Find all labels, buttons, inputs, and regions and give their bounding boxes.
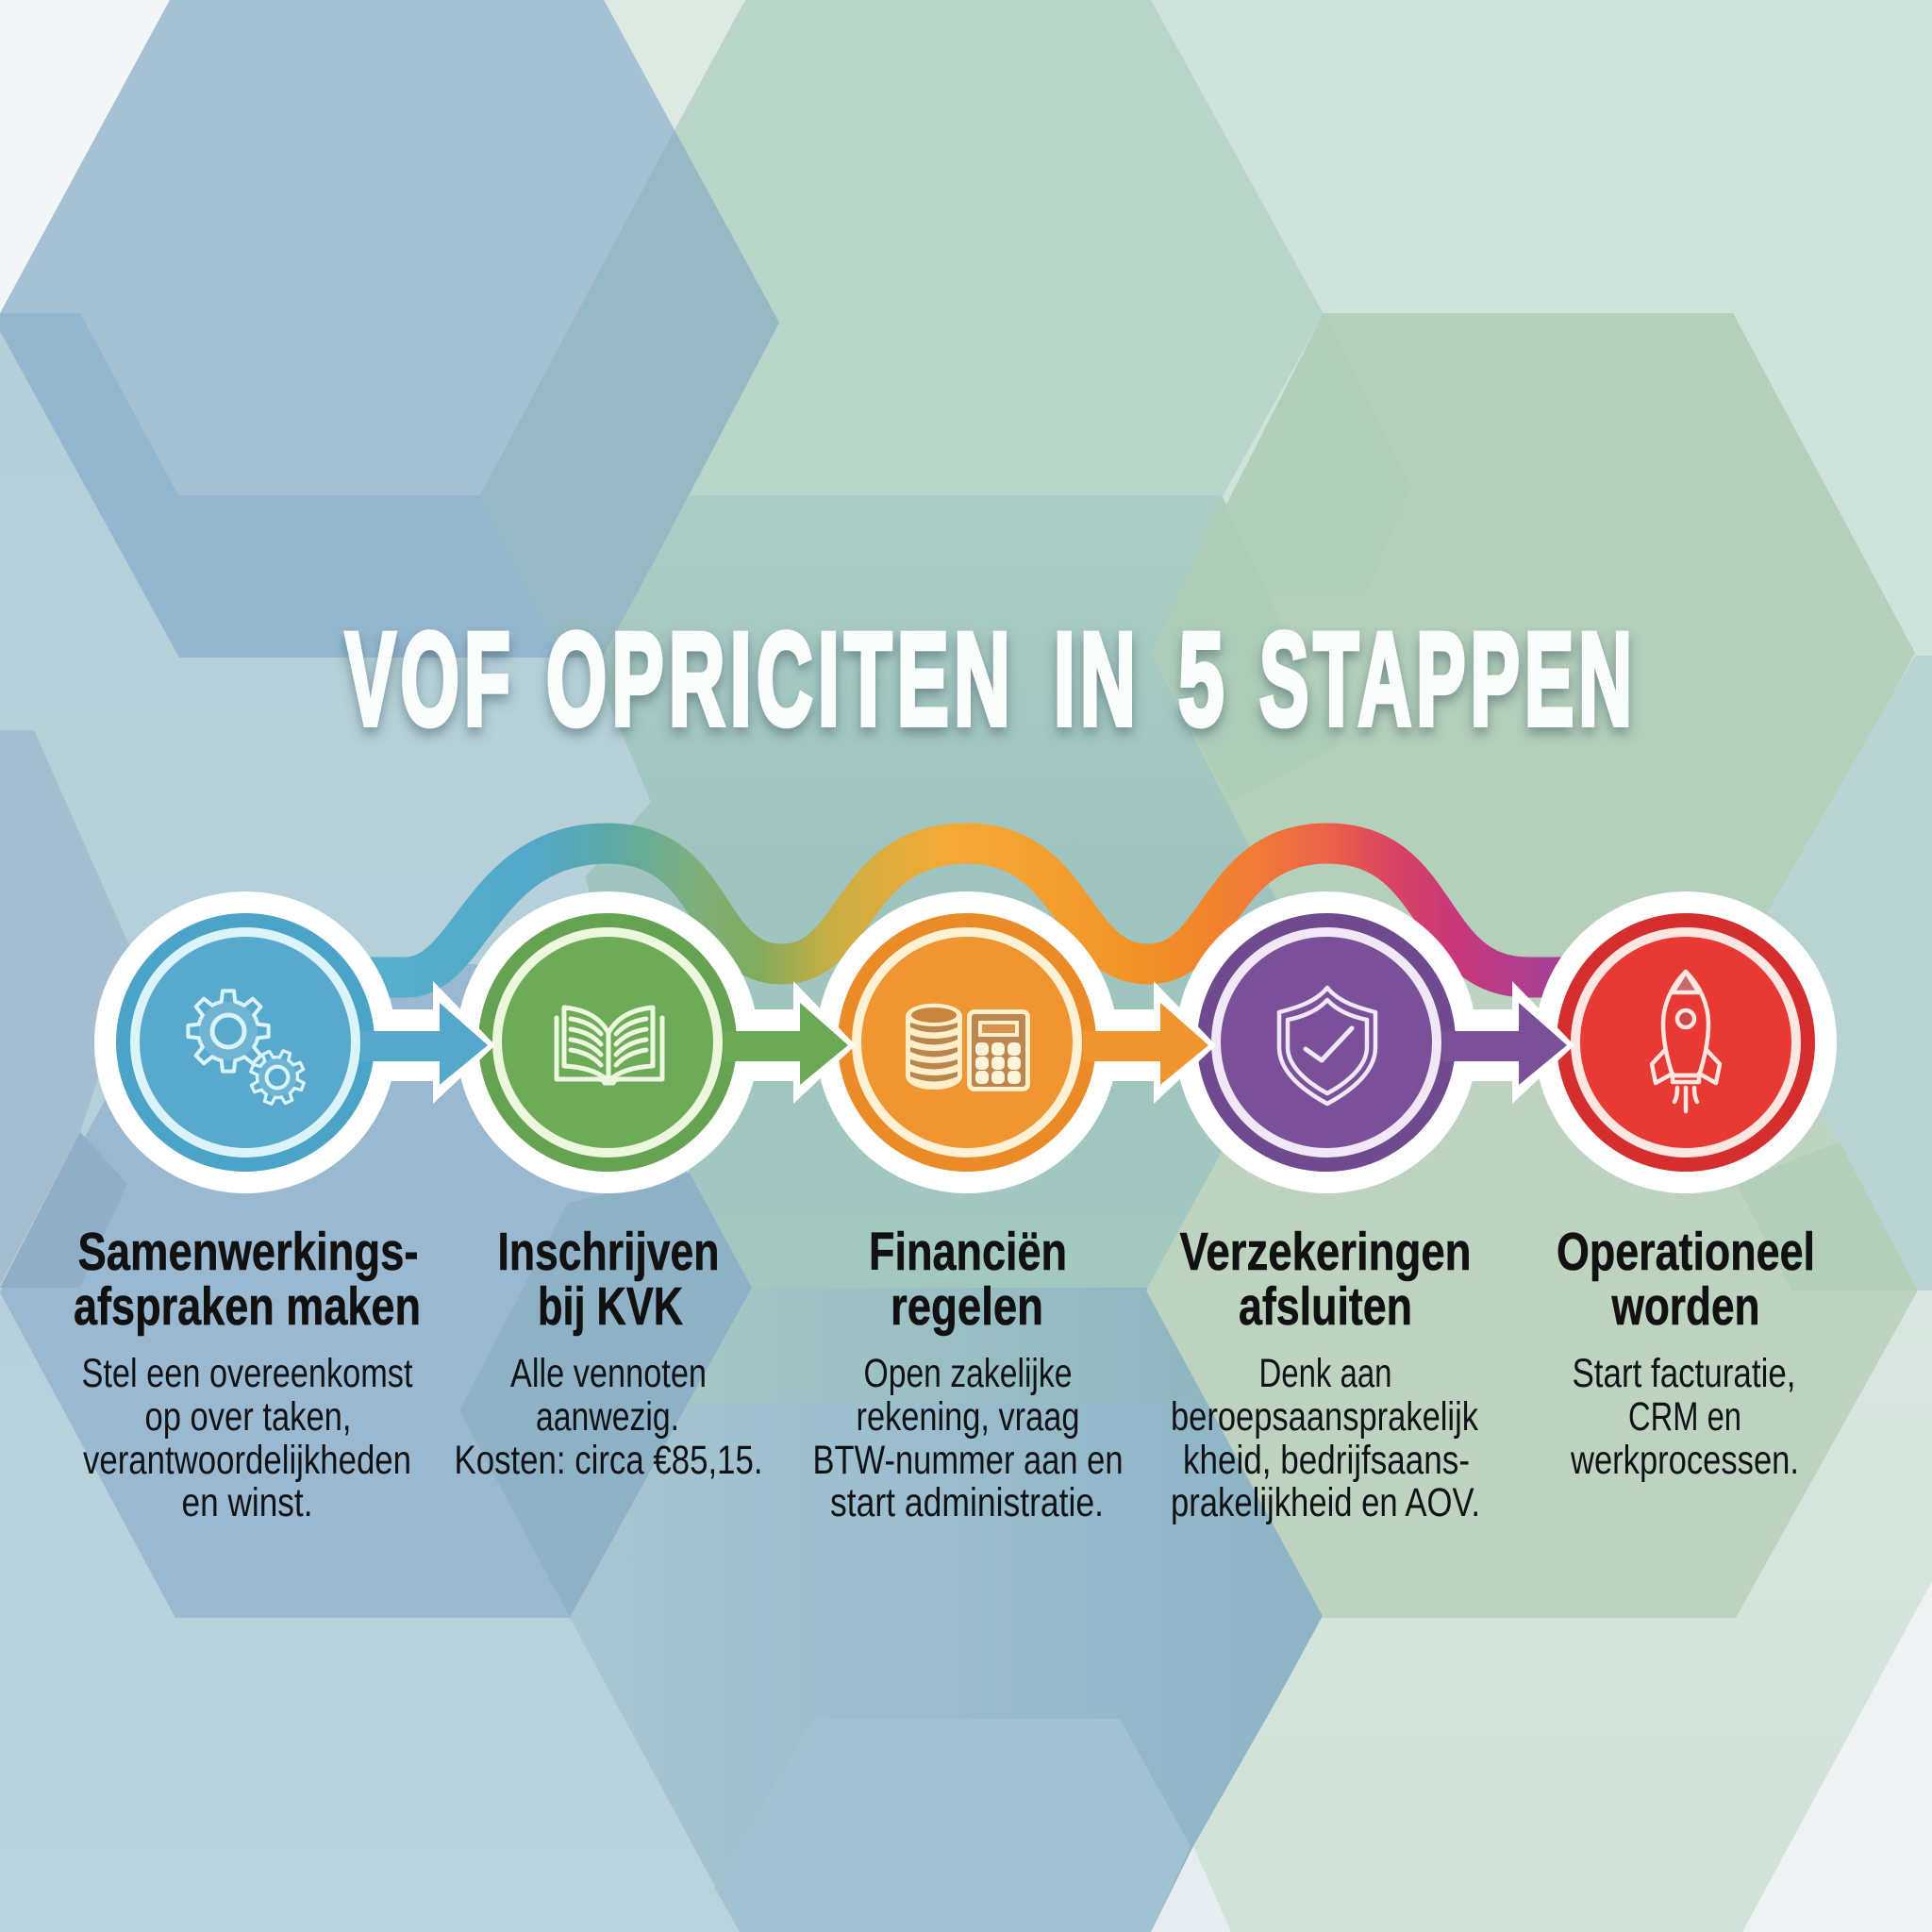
step 5 heading: worden bbox=[1611, 1276, 1760, 1337]
step 1 heading: afspraken maken bbox=[74, 1276, 421, 1337]
step 4 heading: Verzekeringen bbox=[1179, 1222, 1472, 1282]
icon: gears bbox=[188, 991, 312, 1112]
step 3 description: BTW-nummer aan en bbox=[813, 1438, 1123, 1483]
step 4 description: beroepsaansprakelijk bbox=[1171, 1394, 1478, 1440]
step 1 text bbox=[74, 1222, 421, 1525]
step 2 heading bbox=[498, 1222, 719, 1337]
step 2 description: Kosten: circa €85,15. bbox=[455, 1438, 762, 1483]
title: 5 bbox=[1178, 605, 1229, 753]
step 2 description bbox=[455, 1351, 762, 1483]
title: VOF bbox=[345, 605, 515, 753]
step 1 circle: blue bbox=[94, 891, 396, 1193]
step 4 circle: purple bbox=[1175, 891, 1477, 1193]
title: OPRICITEN bbox=[546, 605, 1015, 753]
arrow 4 to 5 bbox=[1442, 981, 1574, 1104]
step 2 description: Alle vennoten bbox=[510, 1351, 707, 1396]
step 3 heading: Financiën bbox=[869, 1222, 1067, 1282]
white connector bars behind the circles bbox=[373, 1009, 1520, 1081]
step 2 heading: bij KVK bbox=[538, 1276, 683, 1337]
title: IN bbox=[1054, 605, 1141, 753]
step 4 description: prakelijkheid en AOV. bbox=[1171, 1480, 1480, 1525]
step 1 description: en winst. bbox=[181, 1480, 313, 1525]
step 2 heading: Inschrijven bbox=[498, 1222, 719, 1282]
step 3 heading: regelen bbox=[891, 1276, 1043, 1337]
title bbox=[345, 605, 1637, 753]
step 4 heading: afsluiten bbox=[1239, 1276, 1412, 1337]
arrow 3 to 4 bbox=[1083, 981, 1216, 1104]
step 4 description: kheid, bedrijfsaans- bbox=[1183, 1438, 1470, 1483]
step 1 heading bbox=[74, 1222, 421, 1337]
icon: open book bbox=[557, 1008, 662, 1083]
step 5 description: Start facturatie, bbox=[1572, 1351, 1796, 1396]
step 3 description: start administratie. bbox=[830, 1480, 1104, 1525]
step 3 description bbox=[813, 1351, 1123, 1525]
title: STAPPEN bbox=[1259, 605, 1637, 753]
step 5 circle: red bbox=[1535, 891, 1837, 1193]
step 3 description: Open zakelijke bbox=[864, 1351, 1072, 1396]
step 1 description: op over taken, bbox=[145, 1394, 351, 1440]
icon: coins and calculator bbox=[906, 1004, 1030, 1091]
step 1 description: verantwoordelijkheden bbox=[83, 1438, 411, 1483]
step 3 circle: orange bbox=[816, 891, 1118, 1193]
step 3 description: rekening, vraag bbox=[857, 1394, 1079, 1440]
step 1 heading: Samenwerkings- bbox=[77, 1222, 419, 1282]
step 2 description: aanwezig. bbox=[536, 1394, 679, 1440]
step 4 heading bbox=[1179, 1222, 1472, 1337]
step 1 description bbox=[81, 1351, 413, 1525]
step 2 text bbox=[455, 1222, 762, 1483]
step 5 description: CRM en bbox=[1628, 1394, 1741, 1440]
step 5 description: werkprocessen. bbox=[1570, 1438, 1799, 1483]
icon: shield with check bbox=[1279, 988, 1375, 1104]
wavy gradient connector bbox=[368, 843, 1575, 977]
step 3 text bbox=[813, 1222, 1123, 1525]
step 4 description: Denk aan bbox=[1258, 1351, 1392, 1396]
step 5 heading bbox=[1557, 1222, 1815, 1337]
step 1 description: Stel een overeenkomst bbox=[81, 1351, 413, 1396]
step 5 description bbox=[1570, 1351, 1799, 1483]
step 5 heading: Operationeel bbox=[1557, 1222, 1815, 1282]
arrow 2 to 3 bbox=[724, 981, 856, 1104]
step 5 text bbox=[1557, 1222, 1815, 1483]
step 4 description bbox=[1171, 1351, 1480, 1525]
arrow 1 to 2 bbox=[361, 981, 495, 1104]
step 3 heading bbox=[869, 1222, 1067, 1337]
icon: rocket bbox=[1652, 972, 1720, 1111]
step 4 text bbox=[1171, 1222, 1480, 1525]
step 2 circle: green bbox=[457, 891, 758, 1193]
